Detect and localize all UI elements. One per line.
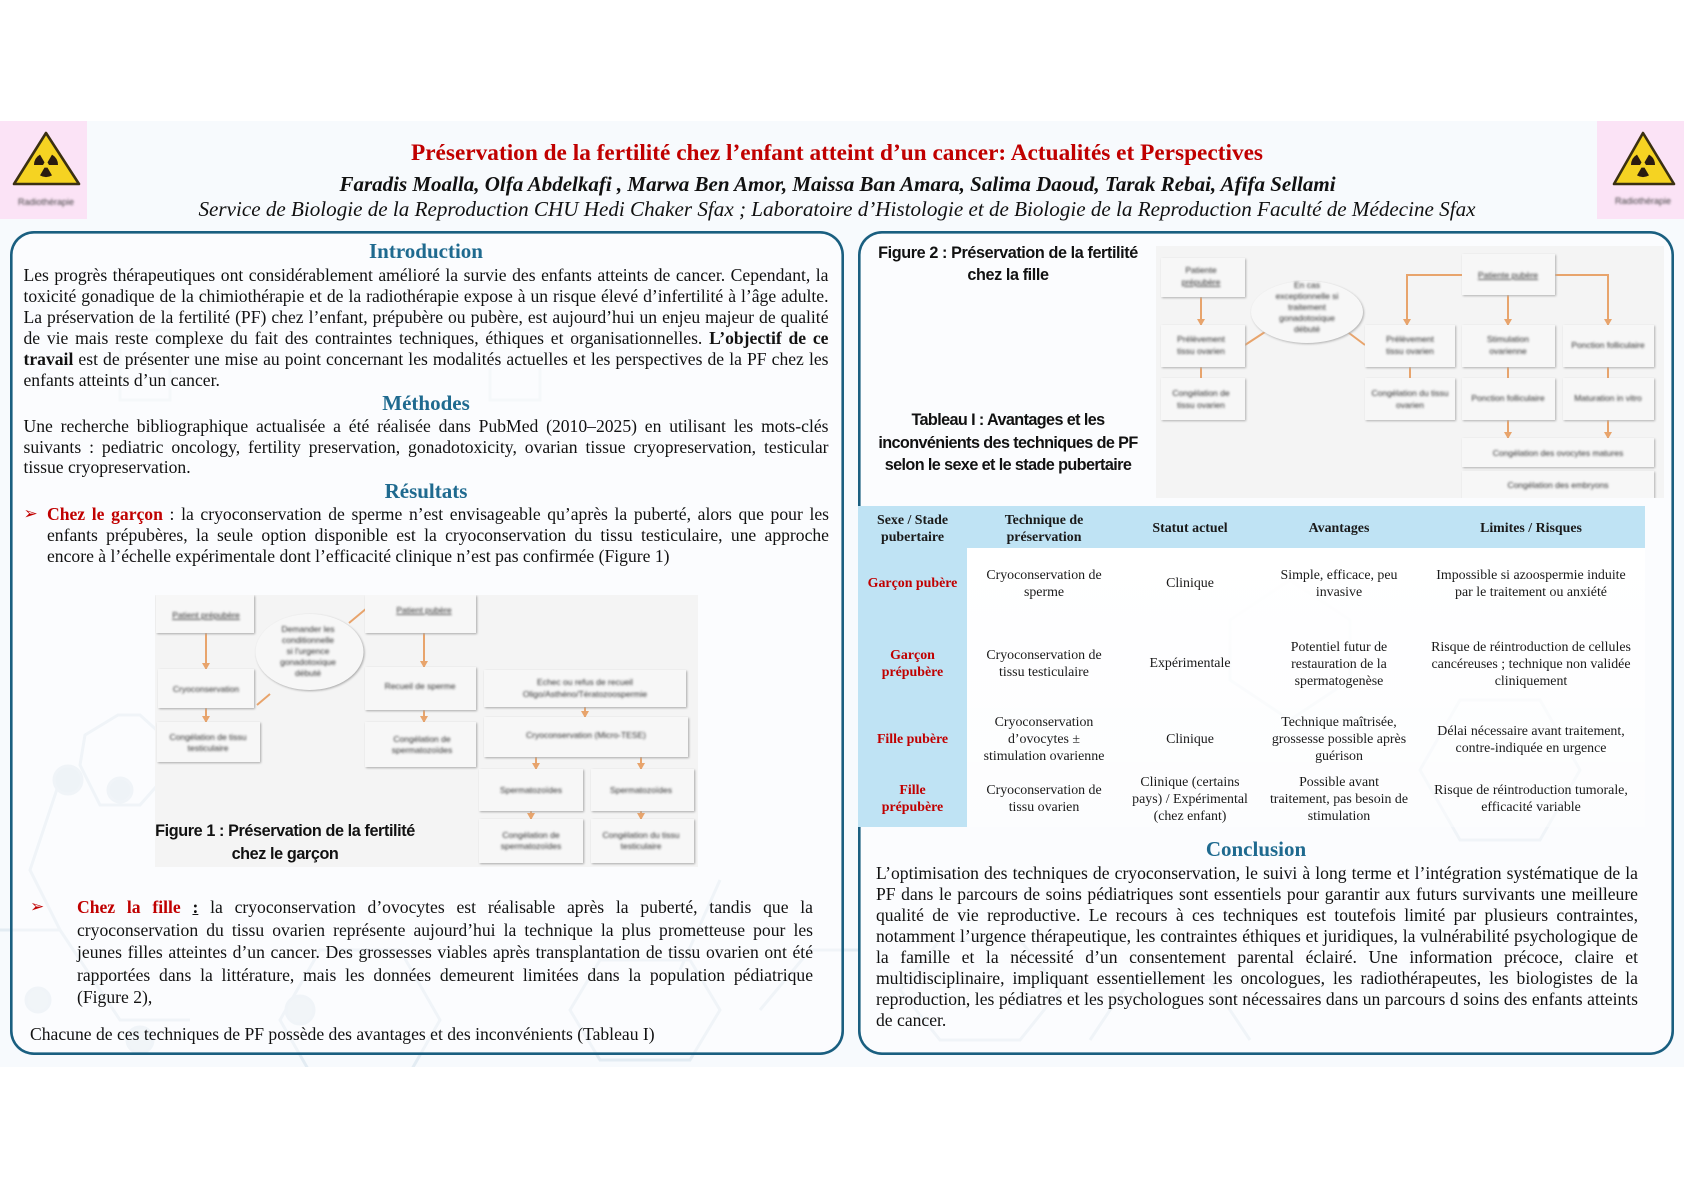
figure 1: flowchart boy: Oligo/Asthéno/Tératozoospermie (523, 689, 647, 699)
figure 1: flowchart boy: Echec ou refus de recueil (537, 677, 633, 687)
heading: introduction: Introduction (369, 239, 483, 263)
figure 1: flowchart boy: Congélation de (393, 734, 451, 744)
text: chez le garcon (24, 504, 829, 566)
text: conclusion: multidisciplinaire, impliquant essentiellement les oncologues, les radiothérapeutes, les biologistes de la (876, 968, 1638, 988)
figure 2: flowchart girl: exceptionnelle si (1276, 291, 1339, 301)
text: chez la fille: cryoconservation du tissu ovarien représente aujourd’hui la technique la plus prometteuse pour les (77, 920, 813, 940)
heading: resultats: Résultats (385, 479, 467, 503)
caption: tableau I: inconvénients des techniques de PF (878, 434, 1138, 452)
caption: figure 1: chez le garçon (232, 845, 338, 863)
text: chez la fille: ➢ (30, 897, 44, 917)
table I: Technique de (1005, 512, 1083, 528)
figure 1: flowchart boy: Demander les (282, 624, 334, 634)
text: chez le garcon: encore à l’échelle expérimentale dont l’efficacité clinique n’est pas confirmée (Figure 1) (47, 546, 670, 566)
text: chez la fille: jeunes filles atteintes d’un cancer. Des grossesses viables après transplantation de tissu ovarien ont été (77, 942, 813, 962)
table I: prépubère (882, 800, 943, 814)
figure 1: flowchart boy: gonadotoxique (280, 657, 336, 667)
text: introduction: La préservation de la fertilité (PF) chez l’enfant, prépubère ou pubère, est aujourd’hui un enjeu majeur de qualité (24, 306, 828, 326)
table I: Simple, efficace, peu (1280, 568, 1398, 582)
caption: tableau I (878, 411, 1138, 474)
text: methodes: tissue cryopreservation. (24, 456, 191, 476)
text: conclusion: la famille et la nécessité d’un consentement parental éclairé. Une information précoce, claire et (876, 946, 1638, 966)
figure 2: flowchart girl: Prélèvement (1386, 334, 1434, 344)
text: chez la fille: Chez la fille : la cryoconservation d’ovocytes est réalisable après la puberté, tandis que la (77, 897, 813, 917)
panel: left (10, 231, 844, 1054)
table I: Limites / Risques (1480, 520, 1582, 536)
table I (858, 506, 1645, 827)
table I: cancéreuses ; technique non validée (1431, 656, 1630, 672)
figure 2: flowchart girl: Ponction folliculaire (1471, 393, 1545, 403)
figure 1: flowchart boy: Spermatozoïdes (500, 785, 562, 795)
heading: methodes: Méthodes (382, 391, 470, 415)
text: chez la fille (30, 897, 813, 1007)
table I: Avantages (1309, 520, 1369, 536)
caption: tableau I: selon le sexe et le stade pubertaire (885, 456, 1131, 474)
figure 2: flowchart girl: Congélation du tissu (1371, 388, 1449, 398)
text: conclusion: qualité de vie reproductive. Le recours à ces techniques est toutefois limité par plusieurs contraintes, (876, 904, 1638, 924)
text: conclusion: reproduction, les pédiatres et les psychologues sont nécessaires dans un parcours d soins des enfants atteints (876, 988, 1638, 1008)
text: chez la fille: (Figure 2), (77, 987, 152, 1007)
table I: Garçon (890, 648, 935, 662)
figure 1: flowchart boy: spermatozoïdes (501, 841, 561, 851)
figure 1: flowchart boy: testiculaire (621, 841, 662, 851)
figure 2: flowchart girl (1156, 246, 1664, 498)
text: methodes: Une recherche bibliographique actualisée a été réalisée dans PubMed (2010–2025) en utilisant les mots-clés (24, 416, 828, 436)
text: conclusion: PF dans le parcours de soins pédiatriques sont essentiels pour garantir aux futurs survivants une meilleure (876, 884, 1638, 904)
text: chez le garcon: ➢ (24, 504, 38, 524)
table I: Risque de réintroduction de cellules (1431, 640, 1631, 654)
table I: stimulation ovarienne (984, 748, 1104, 764)
text: introduction (24, 264, 828, 390)
figure 2: flowchart girl: Ponction folliculaire (1571, 340, 1645, 350)
table I: Risque de réintroduction tumorale, (1434, 782, 1628, 798)
figure 2: flowchart girl: gonadotoxique (1279, 313, 1335, 323)
table I: (chez enfant) (1154, 808, 1226, 824)
table I: d’ovocytes ± (1008, 732, 1080, 746)
figure 2: flowchart girl: Patiente pubère (1478, 270, 1538, 280)
figure 1: flowchart boy: Recueil de sperme (385, 681, 456, 691)
table I: Clinique (certains (1140, 774, 1240, 790)
figure 2: flowchart girl: ovarien (1396, 400, 1424, 410)
figure 2: flowchart girl: prépubère (1182, 277, 1221, 287)
text: introduction: enfants atteints d’un cancer. (24, 370, 220, 390)
table I: spermatogenèse (1295, 674, 1383, 688)
figure 1: flowchart boy: si l'urgence (287, 646, 330, 656)
figure 1: flowchart boy: Cryoconservation (173, 684, 239, 694)
text: methodes (24, 416, 828, 477)
table I: Clinique (1166, 732, 1214, 746)
figure 1: flowchart boy: Congélation de tissu (169, 732, 247, 742)
table I: Sexe / Stade (877, 512, 948, 528)
table I: par le traitement ou anxiété (1455, 584, 1607, 600)
table I: sperme (1024, 584, 1064, 600)
text: introduction: de vie mais reste complexe du fait des contraintes techniques, éthiques et organisationnelles. L’objectif de ce (24, 328, 828, 348)
text: conclusion: L’optimisation des techniques de cryoconservation, le suivi à long terme et l’intégration systématique de la (876, 862, 1638, 882)
table I: Cryoconservation de (986, 782, 1102, 798)
figure 2: flowchart girl: débuté (1294, 324, 1320, 334)
figure 2: flowchart girl: tissu ovarien (1386, 346, 1434, 356)
text: chez le garcon: Chez le garçon : la cryoconservation de sperme n’est envisageable qu’après la puberté, alors que pour les (47, 504, 829, 524)
table I: Potentiel futur de (1291, 640, 1387, 654)
figure 1: flowchart boy: Patient pubère (396, 605, 452, 615)
text: chez la fille: rapportées dans la littérature, mais les données demeurent limitées dans la population pédiatrique (77, 965, 813, 985)
figure 1: flowchart boy: Congélation du tissu (602, 830, 680, 840)
table I: préservation (1007, 530, 1081, 544)
table I: Technique maîtrisée, (1281, 714, 1397, 730)
figure 2: flowchart girl: Patiente (1185, 265, 1217, 275)
figure 1: flowchart boy: Cryoconservation (Micro-TESE) (526, 730, 646, 740)
figure 2: flowchart girl: tissu ovarien (1177, 400, 1225, 410)
caption: figure 1: Figure 1 : Préservation de la fertilité (155, 822, 415, 840)
figure 1: flowchart boy: conditionnelle (282, 635, 334, 645)
text: introduction: Les progrès thérapeutiques ont considérablement amélioré la survie des enfants atteints de cancer. Cependant, la (24, 264, 828, 284)
table I: invasive (1316, 584, 1362, 600)
table left column background (858, 548, 967, 827)
table I: guérison (1315, 748, 1363, 764)
figure 2: flowchart girl: Stimulation (1487, 334, 1529, 344)
table I: grossesse possible après (1272, 732, 1406, 746)
icon: radiation left (0, 121, 87, 219)
caption: figure 2 (878, 244, 1138, 284)
table I: Cryoconservation (995, 714, 1093, 730)
poster background (0, 121, 1684, 1067)
caption: figure 2: Figure 2 : Préservation de la fertilité (878, 244, 1138, 262)
affiliations: Service de Biologie de la Reproduction CHU Hedi Chaker Sfax ; Laboratoire d’Histologie et de Biologie de la Reproduction Faculté de Médecine Sfax (198, 197, 1476, 221)
figure 1: flowchart boy: débuté (295, 668, 321, 678)
title: Préservation de la fertilité chez l’enfant atteint d’un cancer: Actualités et Perspectives (411, 140, 1263, 166)
text: introduction: travail est de présenter une mise au point concernant les modalités actuelles et les perspectives de la PF chez les (24, 348, 828, 368)
text: methodes: suivants : pediatric oncology, fertility preservation, gonadotoxicity, ovarian tissue cryopreservation, testicular (24, 436, 828, 456)
figure 1: flowchart boy: testiculaire (188, 743, 229, 753)
table header background (858, 506, 1645, 548)
text: conclusion: notamment l’urgence thérapeutique, les contraintes éthiques et juridiques, la vulnérabilité psychologique de (876, 926, 1638, 946)
panel: right (858, 231, 1674, 1054)
table I: Impossible si azoospermie induite (1436, 568, 1626, 582)
table I: Statut actuel (1152, 520, 1228, 536)
figure 2: flowchart girl: ovarienne (1489, 346, 1527, 356)
table I: tissu testiculaire (999, 664, 1089, 680)
table I: cliniquement (1495, 674, 1567, 688)
figure 2: flowchart girl: tissu ovarien (1177, 346, 1225, 356)
table I: restauration de la (1291, 656, 1387, 672)
figure 1: flowchart boy (155, 595, 698, 867)
caption: tableau I: Tableau I : Avantages et les (911, 411, 1105, 429)
figure 2: flowchart girl: Maturation in vitro (1574, 393, 1642, 403)
figure 1: flowchart boy: Spermatozoïdes (610, 785, 672, 795)
figure 2: flowchart girl: En cas (1294, 280, 1320, 290)
table I: Cryoconservation de (986, 648, 1102, 662)
figure 2: flowchart girl: traitement (1288, 302, 1327, 312)
table I: Fille (899, 782, 926, 798)
table I: contre-indiquée en urgence (1456, 740, 1606, 756)
table I: traitement, pas besoin de (1270, 792, 1408, 806)
heading: conclusion: Conclusion (1206, 837, 1306, 861)
table I: stimulation (1308, 808, 1370, 824)
table I: tissu ovarien (1009, 800, 1079, 814)
icon: radiation right: Radiothérapie (1615, 196, 1671, 206)
table I: pubertaire (881, 530, 944, 544)
text: conclusion: de cancer. (876, 1010, 946, 1030)
table I: prépubère (882, 664, 943, 680)
text: introduction: toxicité gonadique de la chimiothérapie et de la radiothérapie expose à un risque élevé d’infertilité à l’âge adulte. (24, 286, 828, 306)
caption: figure 2: chez la fille (967, 266, 1049, 284)
figure 2: flowchart girl: Congélation des ovocytes matures (1493, 448, 1623, 458)
figure 2: flowchart girl: Congélation des embryons (1507, 480, 1609, 490)
figure 1: flowchart boy: Patient prépubère (172, 610, 240, 620)
background molecule pattern (0, 714, 1549, 1067)
table I: Cryoconservation de (986, 568, 1102, 582)
figure 1: flowchart boy: spermatozoïdes (392, 745, 452, 755)
table I: pays) / Expérimental (1132, 792, 1248, 806)
figure 2: flowchart girl: Congélation de (1172, 388, 1230, 398)
table I: Clinique (1166, 576, 1214, 591)
table I: Garçon pubère (868, 576, 957, 591)
caption: figure 1 (155, 822, 415, 863)
text: conclusion (876, 862, 1638, 1030)
table I: Possible avant (1299, 774, 1379, 790)
text: closing sentence: Chacune de ces techniques de PF possède des avantages et des inconvénients (Tableau I) (30, 1024, 655, 1044)
table I: Délai nécessaire avant traitement, (1437, 724, 1625, 738)
icon: radiation left: Radiothérapie (18, 197, 74, 207)
text: chez le garcon: enfants prépubères, la seule option disponible est la cryoconservation du tissu testiculaire, une approche (47, 524, 829, 544)
table I: Expérimentale (1150, 656, 1230, 670)
authors: Faradis Moalla, Olfa Abdelkafi , Marwa Ben Amor, Maissa Ban Amara, Salima Daoud, Tarak Rebai, Afifa Sellami (339, 172, 1336, 196)
table I: Fille pubère (877, 732, 948, 746)
figure 2: flowchart girl: Prélèvement (1177, 334, 1225, 344)
table body background (967, 548, 1645, 827)
figure 1: flowchart boy: Congélation de (502, 830, 560, 840)
table I: efficacité variable (1481, 800, 1581, 814)
icon: radiation right (1597, 121, 1684, 219)
